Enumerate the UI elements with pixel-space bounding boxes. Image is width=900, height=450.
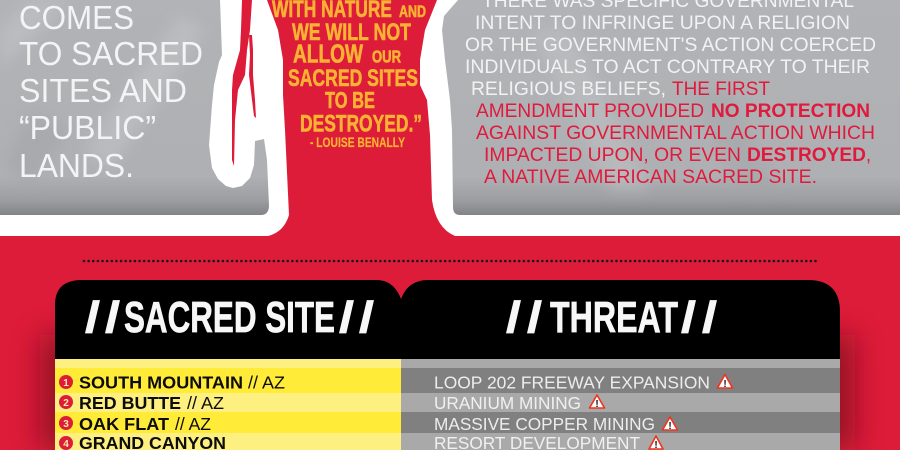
text block: First Amendment explanation: ,: [866, 145, 871, 166]
text block: First Amendment explanation: A NATIVE AMERICAN SACRED SITE.: [484, 167, 817, 188]
site 1: SOUTH MOUNTAIN: [79, 372, 243, 392]
text block: Louise Benally quote: SACRED SITES: [288, 65, 418, 92]
text block: First Amendment explanation: IMPACTED UPON, OR EVEN: [484, 145, 741, 166]
text block: First Amendment explanation: RELIGIOUS BELIEFS,: [471, 79, 666, 100]
site 3: [59, 414, 211, 434]
text block: left heading: COMES: [19, 0, 134, 36]
panel: left grey panel: [0, 0, 269, 215]
threat 3: MASSIVE COPPER MINING: [434, 414, 655, 434]
site 2: // AZ: [187, 393, 224, 413]
text block: Louise Benally quote: DESTROYED.”: [300, 110, 422, 138]
text block: Louise Benally quote: - LOUISE BENALLY: [310, 134, 405, 150]
text block: First Amendment explanation: OR THE GOVERNMENT'S ACTION COERCED: [465, 35, 876, 56]
text block: left heading: [19, 0, 203, 184]
site 1: 1: [63, 378, 69, 389]
text block: First Amendment explanation: DESTROYED: [747, 145, 866, 166]
text block: First Amendment explanation: THE FIRST: [672, 79, 770, 100]
icon: red hair strands: [232, 0, 256, 166]
panel: right grey panel: [442, 0, 900, 215]
text block: First Amendment explanation: NO PROTECTION: [711, 101, 870, 122]
heading: threat: /: [702, 293, 717, 342]
site 4: 4: [63, 439, 69, 450]
panel: threats table: [55, 280, 840, 450]
dotted divider: [84, 260, 818, 262]
threat 2: !: [595, 399, 599, 410]
dark table glow: [40, 335, 855, 450]
text block: Louise Benally quote: OUR: [372, 46, 401, 66]
heading: threat: THREAT: [550, 293, 678, 342]
site 1: // AZ: [248, 372, 285, 392]
site 2: RED BUTTE: [79, 393, 181, 413]
site 2: [59, 393, 224, 413]
heading: sacred site: /: [359, 293, 374, 342]
heading: threat: /: [506, 293, 521, 342]
text block: Louise Benally quote: AND: [399, 3, 426, 21]
text block: First Amendment explanation: INTENT TO INFRINGE UPON A RELIGION: [475, 13, 850, 34]
site 3: // AZ: [175, 414, 211, 434]
text block: left heading: “PUBLIC”: [19, 109, 156, 146]
heading: sacred site: /: [85, 293, 100, 342]
heading: sacred site: SACRED SITE: [124, 293, 335, 342]
site 2: 2: [63, 398, 69, 409]
white silhouette backing: [0, 0, 900, 236]
text block: First Amendment explanation: AMENDMENT PROVIDED: [476, 101, 704, 122]
site 3: 3: [63, 419, 69, 430]
threat 1: !: [723, 379, 727, 390]
threat 2: URANIUM MINING: [434, 393, 581, 413]
threat 1: LOOP 202 FREEWAY EXPANSION: [434, 372, 710, 392]
text block: left heading: SITES AND: [19, 72, 187, 109]
text block: Louise Benally quote: [272, 0, 426, 150]
left column rows: [55, 359, 401, 450]
heading: threat: /: [527, 293, 542, 342]
heading: sacred site: /: [105, 293, 120, 342]
threat 3: !: [668, 421, 672, 432]
text block: left heading: LANDS.: [19, 147, 134, 184]
right column rows: [401, 359, 840, 450]
text block: Louise Benally quote: ALLOW: [293, 40, 364, 68]
text block: First Amendment explanation: AGAINST GOVERNMENTAL ACTION WHICH: [476, 123, 875, 144]
text block: First Amendment explanation: INDIVIDUALS TO ACT CONTRARY TO THEIR: [465, 57, 870, 78]
text block: Louise Benally quote: TO BE: [325, 87, 375, 113]
heading: sacred site: /: [339, 293, 354, 342]
table header background: [55, 280, 840, 359]
text block: First Amendment explanation: [465, 0, 876, 188]
site 3: OAK FLAT: [79, 414, 169, 434]
text block: left heading: TO SACRED: [19, 35, 203, 72]
heading: threat: /: [681, 293, 696, 342]
text block: Louise Benally quote: WE WILL NOT: [292, 19, 411, 46]
